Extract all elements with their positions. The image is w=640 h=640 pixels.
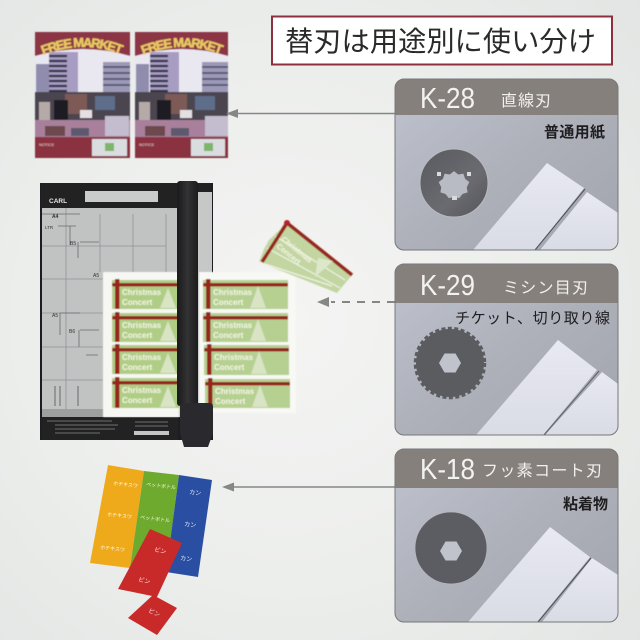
cutting board grid: A4 — [52, 214, 59, 220]
red label small: ビン — [147, 607, 161, 619]
flyer: free market left — [34, 31, 131, 159]
blue sheet: カン — [189, 489, 201, 497]
green sheet: ペットボトル — [146, 481, 176, 491]
panel: K-28: 普通用紙 — [544, 123, 605, 141]
yellow sheet: ホチキスワ — [100, 545, 125, 554]
panel: K-28 — [395, 79, 618, 250]
red label large: ビン — [137, 575, 151, 586]
paper samples K-29 — [476, 340, 618, 435]
ticket row 1 left: Concert — [122, 298, 153, 307]
color sorted labels — [90, 465, 212, 635]
ticket row 4 left: Concert — [122, 396, 153, 405]
panel: K-18: 粘着物 — [563, 495, 608, 513]
ticket row 2 left — [112, 312, 180, 342]
serrated blade K-29 — [415, 328, 485, 398]
sheet of tickets left — [103, 272, 180, 417]
ticket row 3 right — [204, 344, 289, 375]
cutting board grid — [42, 208, 212, 417]
cutter base — [40, 183, 213, 440]
blue sheet — [166, 475, 212, 577]
cut tickets fan: Concert — [275, 242, 303, 267]
panel: K-28: 直線刃 — [501, 92, 551, 110]
blue sheet: カン — [184, 521, 196, 529]
panel: K-29: K-29 — [420, 270, 475, 302]
flyer: free market right — [134, 31, 229, 159]
title box — [272, 16, 612, 64]
cutter arm and handle — [177, 181, 213, 447]
ticket row 4 right: Christmas — [215, 387, 255, 396]
cutting board grid: A5 — [93, 273, 99, 279]
panel: K-18 — [395, 449, 618, 622]
panel: K-28: K-28 — [420, 83, 475, 115]
cut tickets fan: Christmas — [280, 235, 314, 265]
ticket row 4 left — [112, 377, 180, 408]
flyer: free market right: FREE MARKET — [140, 36, 225, 56]
ticket row 4 right — [205, 378, 290, 408]
sheet of tickets right — [199, 272, 296, 413]
panel: K-29: チケット、切り取り線 — [455, 310, 610, 327]
paper samples K-28 — [473, 163, 618, 250]
cutter top band with window and logo: CARL — [49, 198, 67, 205]
blade K-28 — [420, 149, 488, 217]
red label large — [118, 529, 182, 597]
ticket row 1 right — [203, 279, 288, 309]
ticket row 2 right: Concert — [213, 331, 244, 340]
ticket row 2 left: Christmas — [122, 321, 162, 330]
flyer: free market left: FREE MARKET — [40, 36, 125, 56]
paper samples K-18 — [468, 527, 618, 622]
green sheet — [130, 471, 179, 572]
ticket row 2 left: Concert — [122, 331, 153, 340]
yellow sheet: ホチキスワ — [113, 481, 138, 490]
ticket row 1 right: Concert — [213, 298, 244, 307]
ticket row 2 right: Christmas — [213, 321, 253, 330]
ticket row 3 left — [112, 344, 180, 374]
blue sheet: カン — [180, 555, 192, 563]
yellow sheet — [90, 465, 144, 568]
arrow: k-28 to flyers — [226, 109, 395, 118]
ticket row 4 left: Christmas — [122, 386, 162, 395]
cutting board grid: B5 — [70, 241, 76, 247]
cutting board grid: A5 — [52, 313, 58, 319]
ticket row 3 right: Christmas — [214, 353, 254, 362]
panel: K-18: フッ素コート刃 — [482, 462, 602, 480]
header bar K-28 — [395, 79, 618, 115]
panel: K-18: K-18 — [420, 454, 475, 486]
header bar K-29 — [395, 264, 618, 303]
cut tickets fan — [259, 220, 352, 293]
cutter top band with window and logo — [41, 183, 211, 208]
cutting board grid: B6 — [69, 329, 75, 335]
panel: K-29: ミシン目刃 — [503, 280, 588, 297]
ticket row 3 left: Christmas — [122, 353, 162, 362]
ticket row 3 right: Concert — [214, 363, 245, 372]
blade K-18 — [415, 512, 487, 584]
red label small — [128, 595, 177, 635]
right metal rail — [198, 192, 212, 414]
ticket row 3 left: Concert — [122, 363, 153, 372]
paper cutter — [40, 183, 213, 440]
ticket row 1 left — [112, 279, 180, 309]
ticket row 4 right: Concert — [215, 397, 246, 406]
ticket row 2 right — [203, 312, 288, 342]
flyer: free market left: NOTICE — [39, 142, 54, 147]
header bar K-18 — [395, 449, 618, 488]
green sheet: ペットボトル — [140, 514, 170, 524]
cutter footer print — [42, 417, 178, 440]
ticket row 1 left: Christmas — [122, 288, 162, 297]
flyer: free market right: NOTICE — [139, 142, 154, 147]
arrow: k-29 dashed to tickets — [317, 297, 395, 307]
red label large: ビン — [153, 545, 167, 556]
arrow: k-18 to color labels — [222, 482, 395, 492]
cutting board grid: LTR — [45, 225, 54, 230]
title box: 替刃は用途別に使い分け — [285, 26, 596, 57]
yellow sheet: ホチキスワ — [107, 512, 132, 521]
panel: K-29 — [395, 264, 618, 435]
ticket row 1 right: Christmas — [213, 288, 253, 297]
